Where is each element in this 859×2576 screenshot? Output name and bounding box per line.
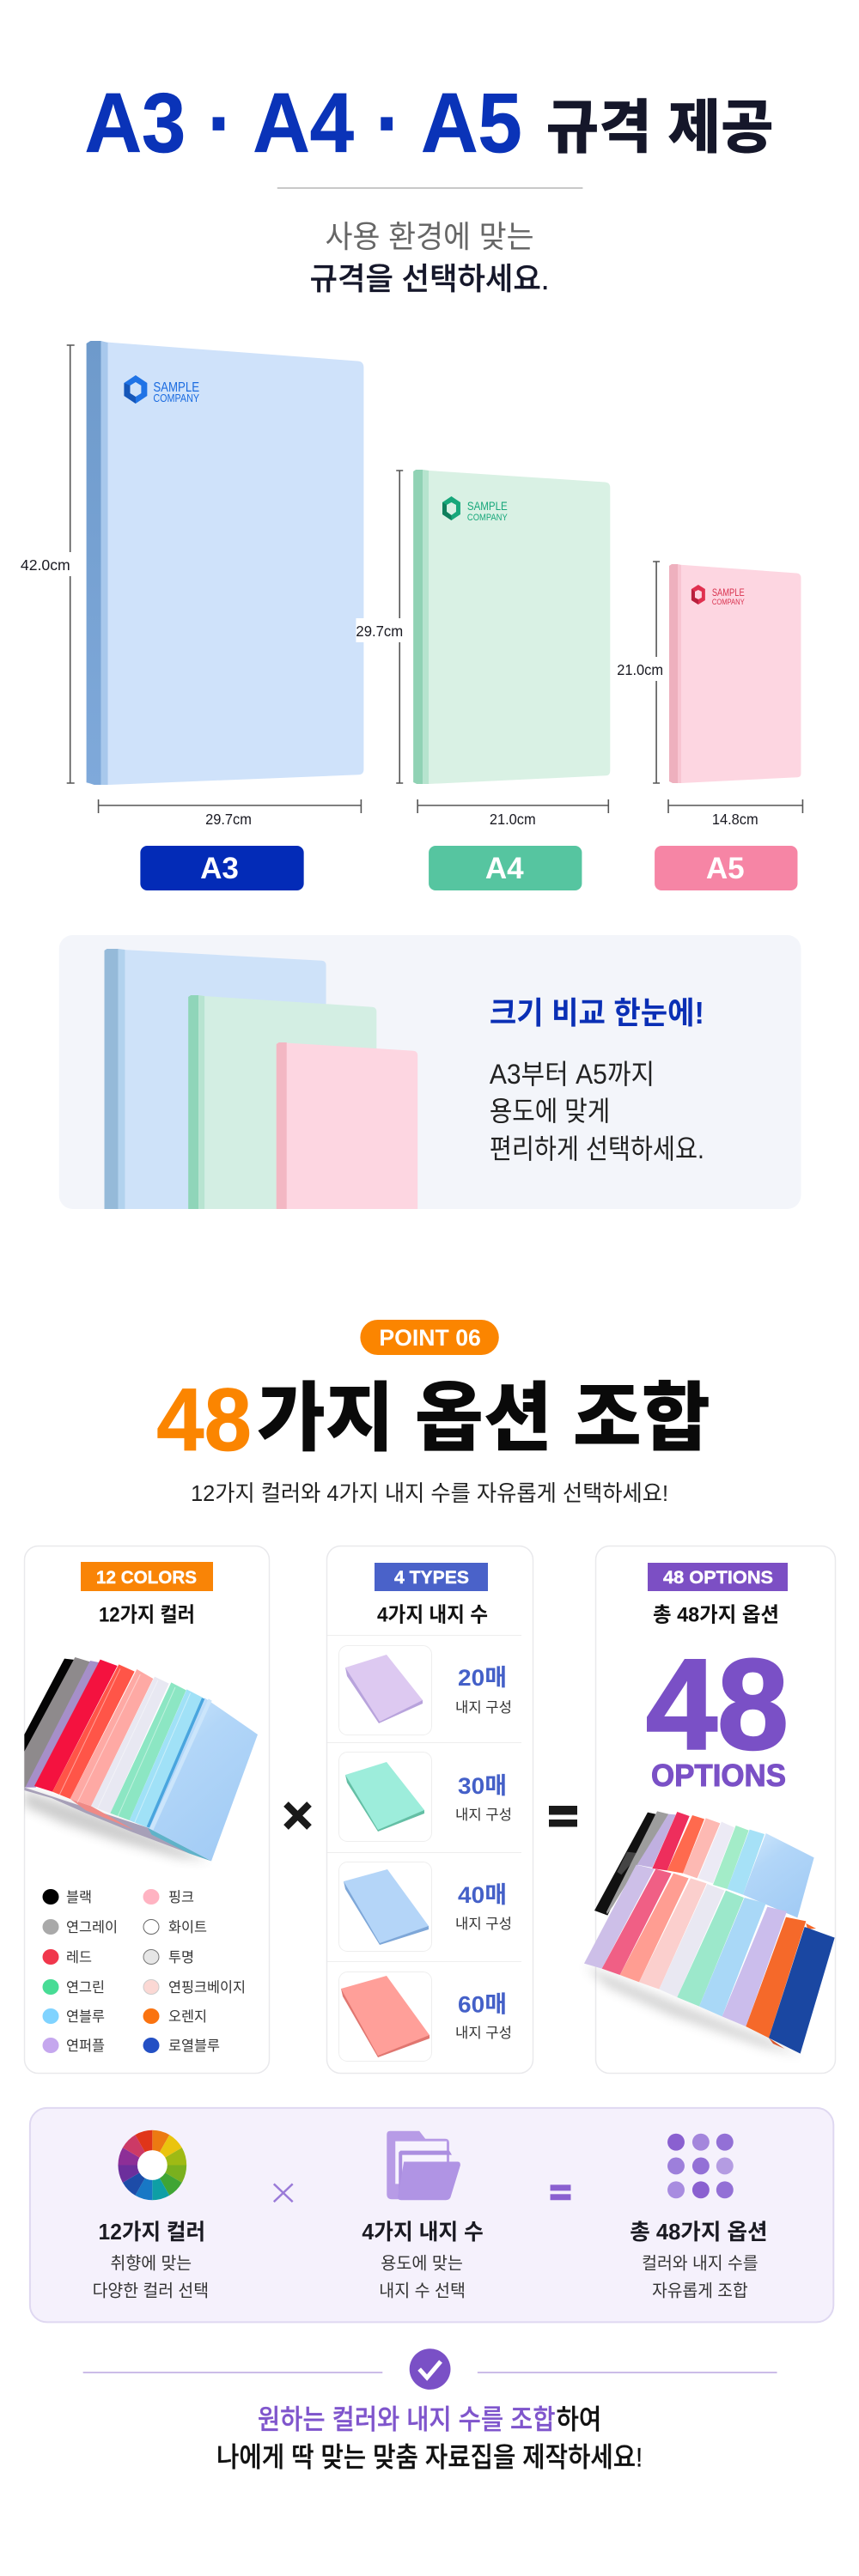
- logo: A5: [691, 585, 745, 606]
- big number: 48: [646, 1631, 789, 1776]
- logo: A3: [124, 375, 200, 404]
- icon: dot grid: [667, 2134, 734, 2198]
- tag: 12 COLORS: [96, 1568, 197, 1588]
- row: 20 sheets: 내지 구성: [455, 1699, 512, 1716]
- text: options: 컬러와 내지 수를: [642, 2254, 758, 2274]
- legend: color list: 핑크: [168, 1889, 194, 1905]
- logo: A4: COMPANY: [467, 513, 508, 523]
- closing message: 원하는 컬러와 내지 수를 조합: [258, 2404, 556, 2435]
- dimension: A5 width: 14.8cm: [712, 811, 758, 828]
- big label: OPTIONS: [651, 1758, 786, 1793]
- icon: color wheel: [118, 2130, 186, 2200]
- closing message: [216, 2404, 643, 2472]
- dimension: A5 height: [617, 562, 663, 783]
- title: [85, 76, 774, 170]
- icon: folders: [387, 2131, 460, 2200]
- text block: 편리하게 선택하세요.: [490, 1133, 704, 1164]
- operator: multiply: [274, 2184, 293, 2202]
- legend: color list: [43, 1889, 246, 2054]
- legend: color list: 화이트: [168, 1919, 207, 1935]
- text: options: 총 48가지 옵션: [630, 2220, 768, 2245]
- label: A3: A3: [200, 852, 239, 885]
- legend: color list: 연핑크베이지: [168, 1979, 246, 1996]
- closing message: 하여: [557, 2404, 601, 2435]
- legend: color list: 투명: [168, 1949, 194, 1965]
- tag: [648, 1563, 788, 1591]
- title: 48: [156, 1370, 252, 1469]
- text: colors: 다양한 컬러 선택: [93, 2281, 209, 2301]
- section: closing: [83, 2348, 777, 2472]
- heading: 4가지 내지 수: [377, 1604, 488, 1626]
- subtitle: 12가지 컬러와 4가지 내지 수를 자유롭게 선택하세요!: [191, 1481, 668, 1506]
- dimension: A4 height: [356, 471, 404, 783]
- card: 4 types: [326, 1546, 533, 2073]
- title: 가지 옵션 조합: [257, 1376, 710, 1461]
- heading: 총 48가지 옵션: [653, 1604, 779, 1626]
- logo: A4: SAMPLE: [467, 499, 508, 513]
- logo: A3: SAMPLE: [153, 380, 199, 395]
- operator: equals: [551, 2184, 570, 2200]
- legend: color list: 연퍼플: [66, 2038, 105, 2054]
- legend: color list: 오렌지: [168, 2008, 207, 2025]
- badge: POINT 06: POINT 06: [379, 1325, 481, 1351]
- row: 40 sheets: 내지 구성: [455, 1916, 512, 1932]
- row: 30 sheets: [338, 1752, 512, 1841]
- subtitle: 사용 환경에 맞는: [326, 219, 534, 254]
- logo: A5: SAMPLE: [712, 588, 745, 598]
- card: 12 colors: [24, 1546, 270, 2073]
- tag: [375, 1563, 488, 1591]
- binders: stacked sizes: [105, 949, 417, 1219]
- operator: equals: [549, 1806, 577, 1827]
- label: A3: [140, 846, 304, 890]
- row: 30 sheets: 30매: [458, 1773, 507, 1799]
- text: sheets: 4가지 내지 수: [362, 2220, 484, 2245]
- row: 30 sheets: 내지 구성: [455, 1807, 512, 1823]
- closing message: 나에게 딱 맞는 맞춤 자료집을 제작하세요!: [216, 2441, 643, 2472]
- label: A5: A5: [706, 852, 745, 885]
- row: 40 sheets: 40매: [458, 1882, 507, 1908]
- tag: 48 OPTIONS: [663, 1568, 773, 1588]
- legend: color list: 연블루: [66, 2008, 105, 2025]
- row: 40 sheets: [338, 1862, 512, 1951]
- legend: color list: 연그린: [66, 1979, 105, 1996]
- logo: A3: COMPANY: [153, 392, 200, 404]
- text block: [490, 1059, 704, 1164]
- text block: A3부터 A5까지: [490, 1059, 655, 1090]
- title: 규격 제공: [546, 96, 774, 161]
- text: options: [630, 2220, 768, 2301]
- operator: multiply: [286, 1804, 309, 1827]
- text: colors: [93, 2220, 209, 2301]
- subtitle: 규격을 선택하세요.: [310, 261, 550, 296]
- text: colors: 12가지 컬러: [99, 2220, 205, 2245]
- row: 20 sheets: 20매: [458, 1665, 507, 1691]
- dimension: A5 width: [668, 799, 802, 828]
- binder: A3: [87, 341, 363, 785]
- text: options: 자유롭게 조합: [652, 2281, 748, 2301]
- tag: 4 TYPES: [394, 1568, 469, 1588]
- dimension: A5 height: 21.0cm: [617, 661, 663, 678]
- text block: 용도에 맞게: [490, 1096, 610, 1127]
- dimension: A4 width: 21.0cm: [490, 811, 536, 828]
- row: 20 sheets: [338, 1645, 512, 1735]
- legend: color list: 로열블루: [168, 2038, 220, 2054]
- label: A4: [429, 846, 582, 890]
- row: 60 sheets: 60매: [458, 1992, 507, 2018]
- image: fan of colored binders: [24, 1657, 258, 1861]
- label: A4: A4: [485, 852, 524, 885]
- dimension: A3 height: 42.0cm: [21, 556, 70, 574]
- label: A5: [655, 846, 797, 890]
- logo: A4: [442, 496, 508, 523]
- card: 48 options: [584, 1546, 835, 2073]
- tag: [81, 1562, 213, 1591]
- panel: size comparison: [59, 935, 801, 1219]
- dimension: A3 width: [99, 799, 361, 828]
- title: [156, 1370, 710, 1469]
- icon: check badge: [410, 2348, 450, 2390]
- section: size options: [21, 76, 802, 1506]
- dimension: A3 width: 29.7cm: [205, 811, 252, 828]
- text: sheets: 내지 수 선택: [379, 2281, 466, 2301]
- dimension: A4 height: 29.7cm: [356, 623, 403, 640]
- heading: 12가지 컬러: [99, 1604, 195, 1626]
- image: two rows of colored binders: [584, 1811, 835, 2055]
- text: colors: 취향에 맞는: [111, 2254, 192, 2274]
- legend: color list: 블랙: [66, 1889, 92, 1905]
- heading: 크기 비교 한눈에!: [490, 995, 704, 1030]
- binder: A4: [413, 470, 610, 784]
- text: sheets: 용도에 맞는: [381, 2254, 463, 2274]
- legend: color list: 레드: [66, 1949, 92, 1965]
- row: 60 sheets: 내지 구성: [455, 2025, 512, 2041]
- row: 60 sheets: [338, 1971, 512, 2061]
- title: A3 · A4 · A5: [85, 76, 522, 170]
- subtitle: [310, 219, 550, 296]
- binder: A5: [669, 564, 801, 783]
- logo: A5: COMPANY: [712, 598, 745, 606]
- badge: POINT 06: [360, 1320, 499, 1355]
- legend: color list: 연그레이: [66, 1919, 118, 1935]
- dimension: A3 height: [21, 345, 75, 783]
- dimension: A4 width: [417, 799, 608, 828]
- text: sheets: [362, 2220, 484, 2301]
- panel: formula summary: [30, 2108, 833, 2322]
